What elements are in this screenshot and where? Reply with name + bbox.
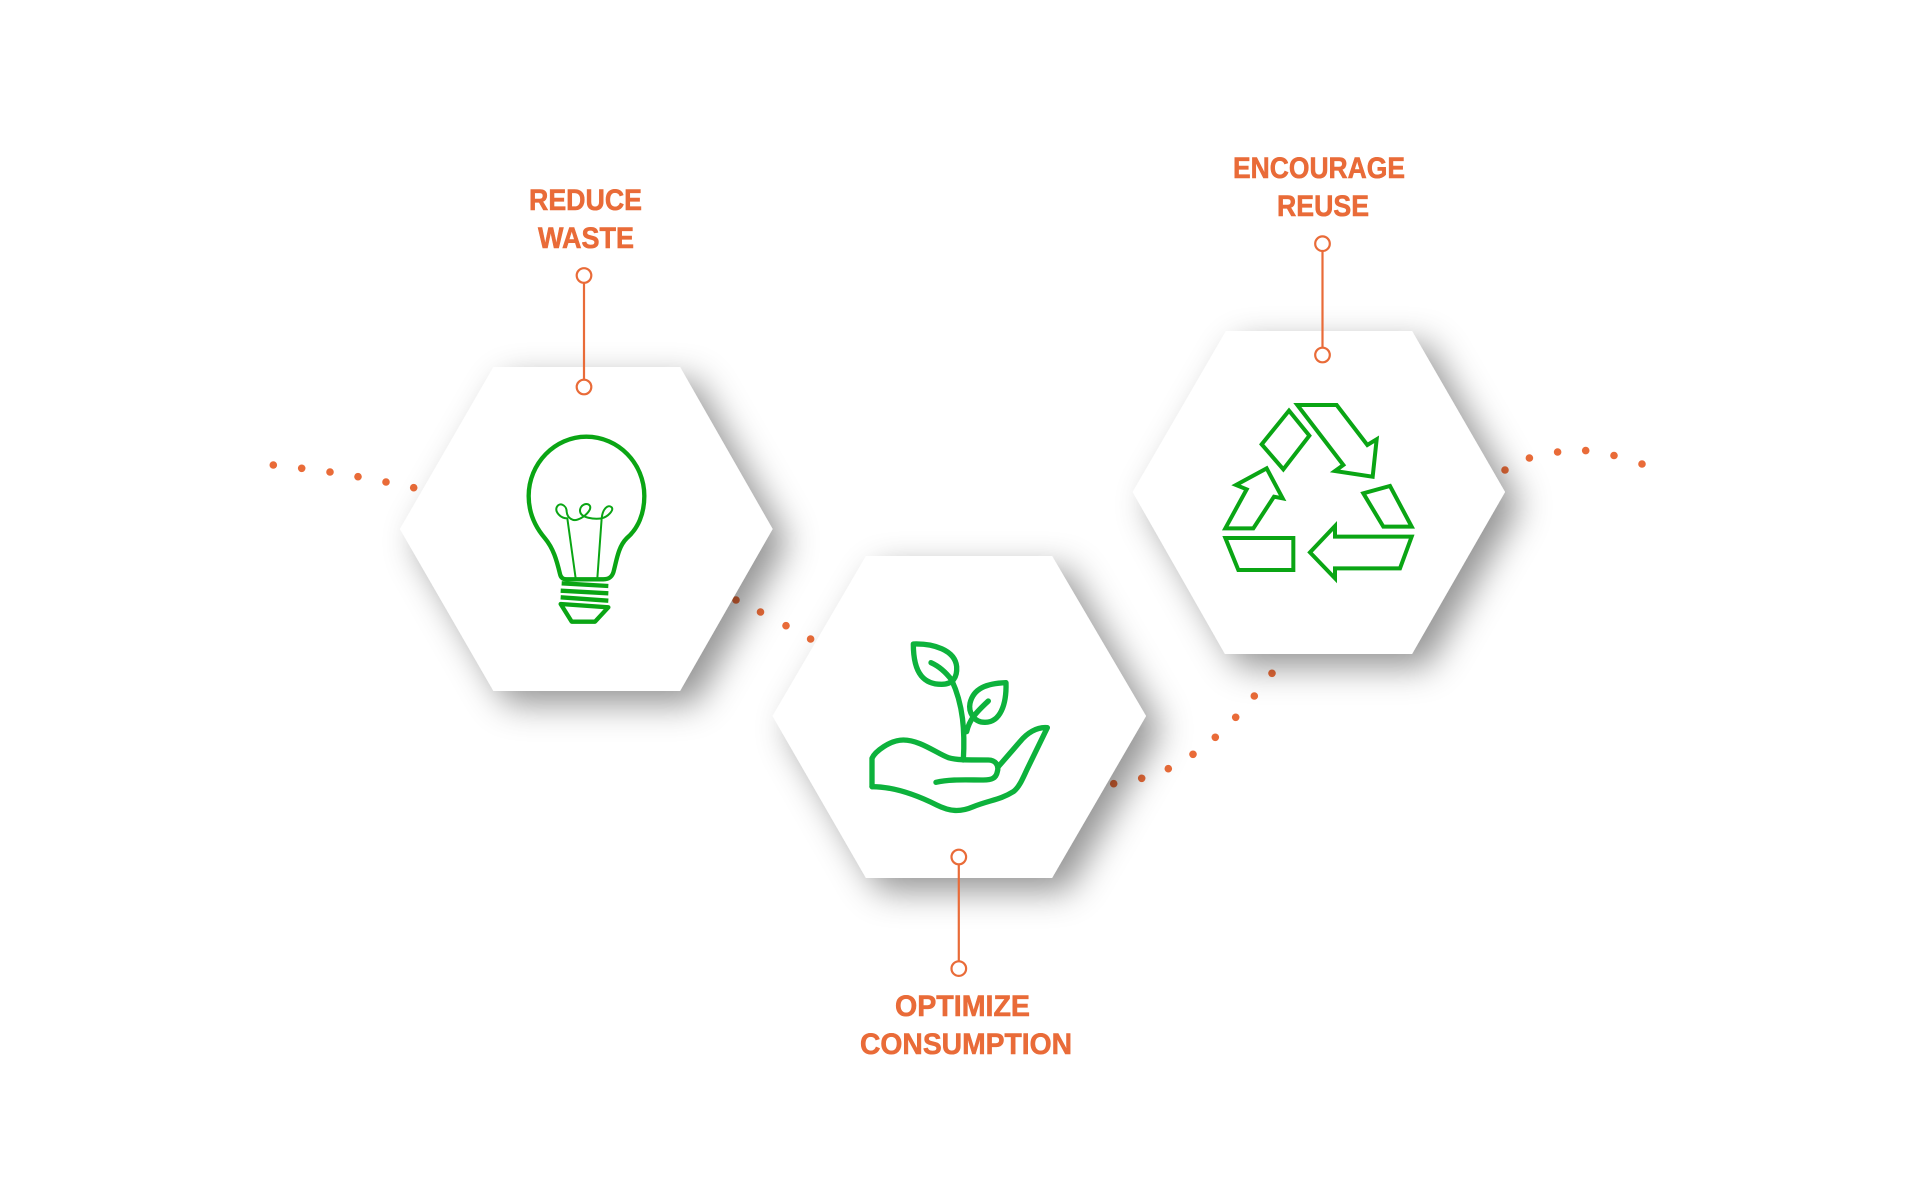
label: encourage reuse [1233, 152, 1405, 223]
label: encourage reuse: REUSE [1277, 190, 1369, 223]
label: reduce waste: REDUCE [529, 184, 642, 217]
connector: encourage reuse [1315, 236, 1330, 362]
label: optimize consumption [860, 990, 1072, 1061]
label: optimize consumption: CONSUMPTION [860, 1028, 1072, 1061]
label: reduce waste [529, 184, 642, 255]
label: reduce waste: WASTE [538, 222, 634, 255]
icon: recycling arrows [1225, 405, 1412, 578]
label: optimize consumption: OPTIMIZE [895, 990, 1030, 1023]
icon: light bulb [529, 437, 644, 622]
connector: optimize consumption [952, 850, 966, 976]
dotted path [270, 447, 1646, 788]
panel: optimize consumption hexagon [773, 556, 1146, 878]
panel: encourage reuse hexagon [1133, 331, 1505, 654]
icon: seedling in hand [872, 644, 1047, 810]
panel: reduce waste hexagon [400, 367, 773, 691]
label: encourage reuse: ENCOURAGE [1233, 152, 1405, 185]
connector: reduce waste [577, 268, 591, 394]
